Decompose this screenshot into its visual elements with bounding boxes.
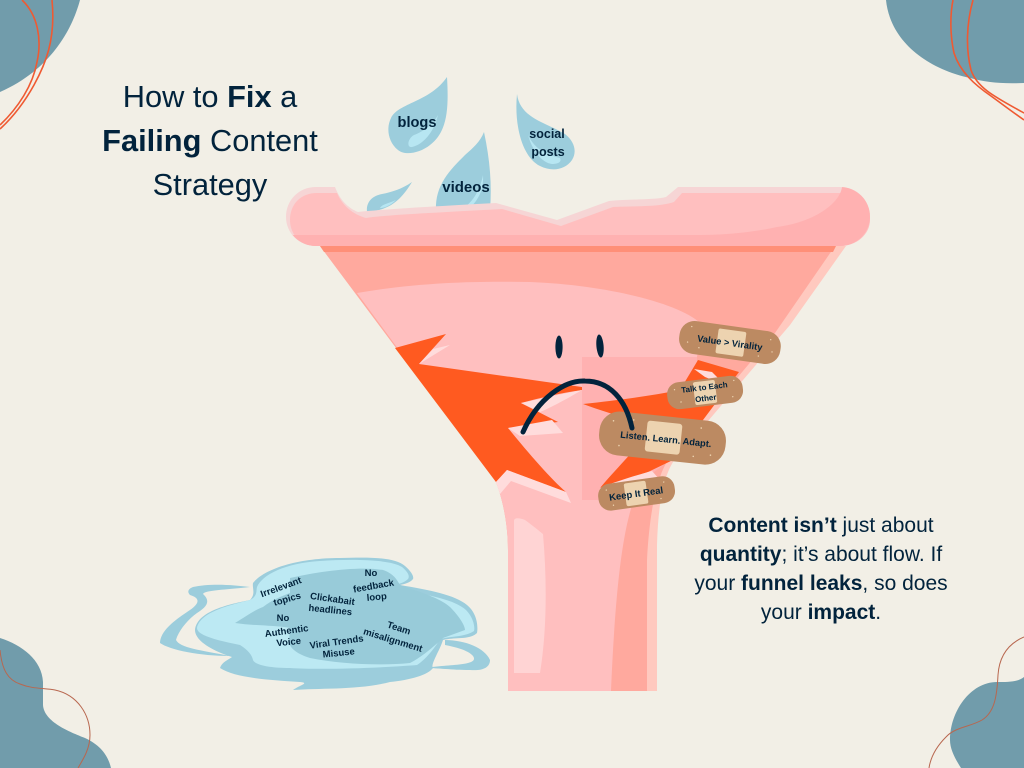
puddle labels: topics: [272, 590, 302, 609]
funnel stem highlight: [514, 518, 546, 673]
face: sad mouth: [523, 381, 632, 432]
puddle highlight: [197, 560, 474, 669]
title: [102, 79, 318, 202]
puddle labels: Viral Trends: [309, 633, 364, 652]
bandage: Value > Virality: Value > Virality: [697, 333, 764, 353]
drop: social posts: [516, 94, 575, 169]
puddle labels: [259, 568, 424, 661]
corner decoration: bottom right: [929, 637, 1024, 768]
funnel dark side: [320, 246, 835, 691]
crack: left tear: [395, 334, 582, 503]
body paragraph: Content isn’t just about: [708, 514, 934, 537]
bandage: Talk to Each Other: Other: [695, 393, 717, 404]
puddle base: [195, 558, 477, 690]
puddle labels: No: [277, 613, 290, 624]
body paragraph: your impact.: [761, 601, 881, 624]
puddle labels: misalignment: [362, 626, 424, 655]
bandage: Talk to Each Other: Talk to Each: [681, 380, 728, 395]
funnel shadow panel: [582, 357, 697, 500]
puddle: [160, 558, 490, 690]
puddle left tail: [160, 585, 250, 656]
drop: social posts: posts: [531, 145, 565, 159]
puddle labels: Irrelevant: [259, 575, 304, 600]
corner decoration: top right: [886, 0, 1024, 120]
face: eyes: [555, 334, 605, 358]
title: How to Fix a: [123, 79, 298, 114]
puddle labels: Misuse: [322, 646, 355, 661]
puddle labels: No: [365, 568, 378, 579]
bandage: Keep It Real: Keep It Real: [609, 485, 664, 504]
puddle labels: headlines: [308, 603, 353, 618]
puddle labels: loop: [366, 591, 387, 604]
funnel light body: [357, 282, 702, 691]
bandage: Talk to Each Other: [666, 374, 744, 411]
bandage: Listen. Learn. Adapt.: Listen. Learn. Adapt.: [620, 430, 712, 449]
puddle labels: Voice: [276, 636, 302, 649]
corner decoration: top left: [0, 0, 80, 129]
funnel silhouette: [320, 246, 846, 691]
drop: blogs: blogs: [398, 115, 436, 131]
body paragraph: quantity; it’s about flow. If: [700, 543, 942, 566]
puddle labels: Authentic: [264, 623, 309, 640]
funnel rim: [280, 187, 880, 250]
drop: social posts: social: [529, 127, 565, 141]
funnel: [280, 187, 880, 691]
puddle labels: Clickabait: [309, 591, 356, 608]
puddle right tail: [425, 640, 490, 670]
drop: videos: videos: [442, 179, 490, 196]
drop: videos: [436, 132, 491, 210]
corner decoration: bottom left: [0, 638, 111, 768]
puddle labels: feedback: [352, 577, 396, 596]
bandage: Value > Virality: [677, 319, 783, 366]
bandage: Listen. Learn. Adapt.: [597, 410, 728, 467]
title: Failing Content: [102, 123, 318, 158]
crack: right tear: [583, 360, 739, 498]
body paragraph: [694, 514, 948, 624]
funnel rim shadow: [320, 246, 836, 252]
drop: blogs: [388, 77, 448, 153]
title: Strategy: [153, 167, 268, 202]
body paragraph: your funnel leaks, so does: [694, 572, 948, 595]
drop: small: [367, 182, 412, 212]
bandage: Keep It Real: [597, 475, 677, 512]
puddle dark pool: [235, 569, 465, 664]
puddle labels: Team: [386, 620, 412, 638]
